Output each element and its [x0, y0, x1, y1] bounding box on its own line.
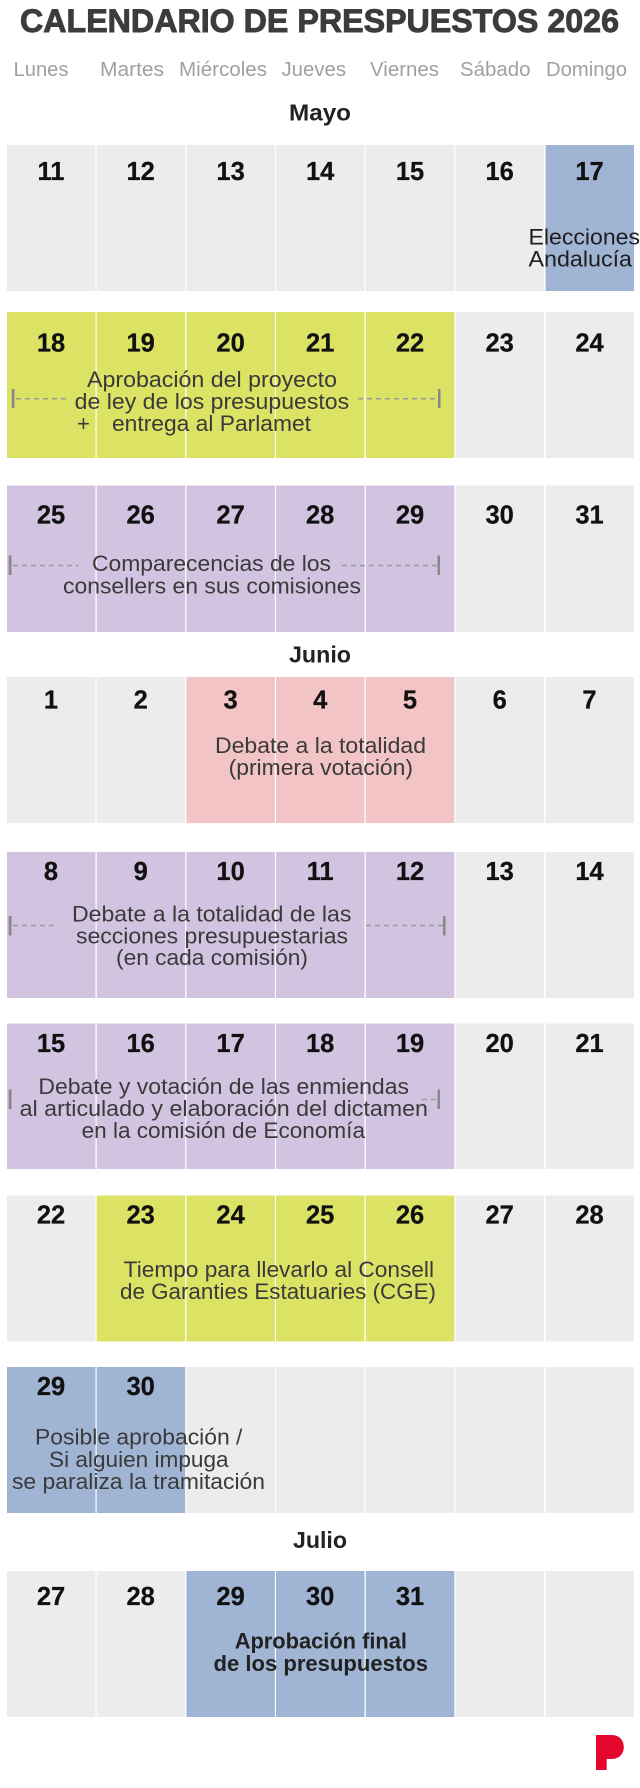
label: Aprobación final: de los presupuestos [214, 1651, 428, 1676]
week row: 15 to 21 June: 17 [216, 1030, 245, 1058]
title: CALENDARIO DE PRESPUESTOS 2026 [20, 3, 619, 39]
weekday header: Viernes [370, 59, 439, 81]
week row: 11 to 17 May: 11 [38, 158, 64, 186]
label: Posible aprobación: Posible aprobación / [35, 1425, 243, 1450]
weekday header: Sábado [460, 59, 530, 81]
week row: 29 to 30 June: 29 [37, 1373, 65, 1401]
weekday header: Martes [100, 59, 164, 81]
week row: 8 to 14 June: 10 [216, 858, 245, 886]
week row: 1 to 7 June: 2 [134, 687, 148, 715]
week row: 18 to 24 May: 24 [575, 330, 604, 358]
week row: 15 to 21 June [7, 1024, 634, 1169]
week row: 25 to 31 May: 25 [37, 501, 65, 529]
label: Aprobación final: Aprobación final [235, 1629, 407, 1654]
week row: 22 to 28 June: 23 [127, 1202, 155, 1230]
label: Debate enmiendas: en la comisión de Economía [82, 1118, 366, 1143]
range marker [9, 556, 440, 575]
week row: 25 to 31 May: 26 [127, 501, 155, 529]
week row: 15 to 21 June: 16 [127, 1030, 155, 1058]
week row: 25 to 31 May: 30 [486, 501, 514, 529]
week row: 22 to 28 June: 26 [396, 1202, 424, 1230]
icon: publisher logo [596, 1735, 624, 1770]
week row: 15 to 21 June: 21 [575, 1030, 604, 1058]
week row: 27 to 31 July: 31 [396, 1583, 424, 1611]
week row: 27 to 31 July: 29 [216, 1583, 245, 1611]
week row: 11 to 17 May: 14 [306, 158, 335, 186]
week row: 18 to 24 May [7, 312, 634, 458]
weekday header: Jueves [282, 59, 346, 81]
week row: 22 to 28 June [7, 1196, 634, 1342]
week row: 8 to 14 June: 12 [396, 858, 424, 886]
week row: 27 to 31 July [7, 1571, 634, 1717]
week row: 11 to 17 May: 12 [127, 158, 155, 186]
week row: 22 to 28 June: 28 [575, 1202, 604, 1230]
range marker [9, 916, 445, 936]
week row: 27 to 31 July: 27 [37, 1583, 65, 1611]
week row: 25 to 31 May: 27 [216, 501, 245, 529]
week row: 22 to 28 June: 24 [216, 1202, 246, 1230]
week row: 22 to 28 June: 25 [306, 1202, 334, 1230]
week row: 22 to 28 June: 22 [37, 1202, 65, 1230]
weekday header: Domingo [546, 59, 627, 81]
week row: 18 to 24 May: 20 [216, 330, 245, 358]
week row: 27 to 31 July: 30 [306, 1583, 334, 1611]
label: Comparecencias: consellers en sus comisiones [63, 573, 361, 598]
weekday header [14, 59, 627, 81]
week row: 25 to 31 May [7, 486, 634, 632]
week row: 8 to 14 June: 14 [575, 858, 604, 886]
label: Debate enmiendas: Debate y votación de las enmiendas [38, 1074, 409, 1099]
week row: 25 to 31 May: 29 [396, 501, 424, 529]
label: Elecciones Andalucía: Elecciones [528, 224, 640, 249]
label: Debate secciones: secciones presupuestarias [76, 923, 348, 948]
week row: 1 to 7 June: 3 [224, 687, 238, 715]
week row: 1 to 7 June [7, 677, 634, 823]
month heading: Julio: Julio [293, 1527, 347, 1553]
week row: 1 to 7 June: 6 [493, 687, 507, 715]
week row: 18 to 24 May: 18 [37, 330, 65, 358]
label: Debate secciones: Debate a la totalidad de las [72, 902, 351, 927]
label: Posible aprobación: Si alguien impuga [49, 1447, 229, 1472]
label: Consell de Garanties: Tiempo para llevarlo al Consell [124, 1257, 434, 1282]
label: Aprobación del proyecto: de ley de los presupuestos [75, 389, 349, 414]
week row: 22 to 28 June: 27 [486, 1202, 514, 1230]
label: Elecciones Andalucía: Andalucía [528, 247, 633, 272]
week row: 29 to 30 June [7, 1367, 634, 1513]
week row: 8 to 14 June: 9 [134, 858, 148, 886]
week row: 1 to 7 June: 7 [582, 687, 597, 715]
week row: 8 to 14 June: 13 [486, 858, 514, 886]
week row: 1 to 7 June: 4 [313, 687, 328, 715]
week row: 15 to 21 June: 15 [37, 1030, 65, 1058]
week row: 25 to 31 May: 31 [575, 501, 604, 529]
week row: 18 to 24 May: 19 [127, 330, 155, 358]
week row: 18 to 24 May: 23 [486, 330, 514, 358]
label: Consell de Garanties: de Garanties Estatuaries (CGE) [120, 1279, 436, 1304]
label: Comparecencias: Comparecencias de los [92, 551, 331, 576]
week row: 11 to 17 May [7, 145, 640, 291]
label: Aprobación del proyecto: + [77, 411, 90, 436]
weekday header: Miércoles [179, 59, 267, 81]
week row: 18 to 24 May: 22 [396, 330, 424, 358]
week row: 8 to 14 June: 8 [44, 858, 58, 886]
week row: 25 to 31 May: 28 [306, 501, 334, 529]
label: Debate secciones: (en cada comisión) [116, 945, 308, 970]
week row: 8 to 14 June [7, 852, 634, 998]
label: Posible aprobación: se paraliza la tramitación [12, 1469, 265, 1494]
week row: 18 to 24 May: 21 [306, 330, 334, 358]
label: Aprobación del proyecto: Aprobación del proyecto [87, 367, 337, 392]
label: Debate enmiendas: al articulado y elaboración del dictamen [20, 1096, 428, 1121]
week row: 11 to 17 May: 13 [216, 158, 245, 186]
month heading: Mayo: Mayo [289, 100, 351, 126]
weekday header: Lunes [14, 59, 68, 81]
week row: 11 to 17 May: 15 [396, 158, 424, 186]
week row: 15 to 21 June: 19 [396, 1030, 424, 1058]
week row: 11 to 17 May: 17 [575, 158, 604, 186]
label: Aprobación del proyecto: entrega al Parlamet [112, 411, 311, 436]
label: Debate a la totalidad: (primera votación) [229, 755, 413, 780]
week row: 27 to 31 July: 28 [127, 1583, 155, 1611]
week row: 11 to 17 May: 16 [486, 158, 514, 186]
week row: 1 to 7 June: 5 [403, 687, 417, 715]
range marker [9, 1090, 440, 1109]
label: Debate a la totalidad: Debate a la totalidad [215, 733, 426, 758]
week row: 15 to 21 June: 18 [306, 1030, 334, 1058]
month heading: Junio: Junio [289, 641, 351, 667]
range marker [12, 389, 440, 408]
week row: 1 to 7 June: 1 [44, 687, 58, 715]
week row: 8 to 14 June: 11 [307, 858, 334, 886]
week row: 15 to 21 June: 20 [486, 1030, 514, 1058]
week row: 29 to 30 June: 30 [127, 1373, 155, 1401]
